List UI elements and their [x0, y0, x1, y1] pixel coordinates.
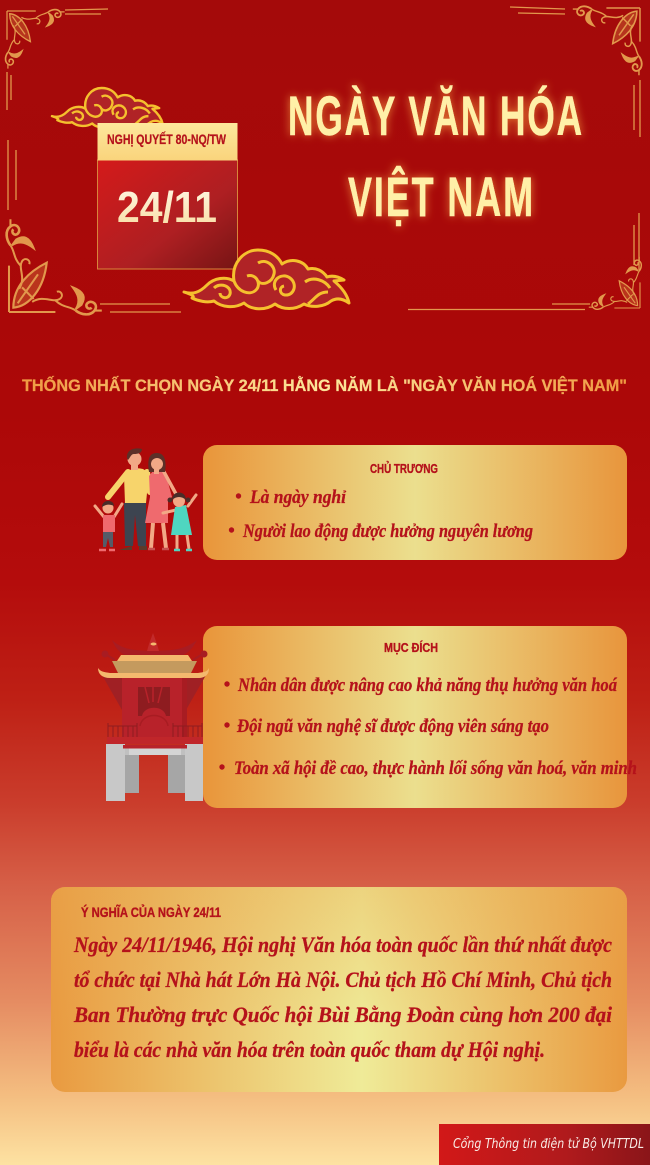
wall	[122, 678, 182, 738]
paragraph: biểu là các nhà văn hóa trên toàn quốc tham dự Hội nghị.	[74, 1037, 545, 1062]
panel heading: CHỦ TRƯƠNG	[370, 461, 438, 476]
calendar header	[98, 123, 238, 160]
side wings	[102, 675, 122, 710]
subheading: THỐNG NHẤT CHỌN NGÀY 24/11 HẰNG NĂM LÀ "NGÀY VĂN HOÁ VIỆT NAM"	[22, 375, 627, 395]
railings	[108, 723, 202, 737]
title	[288, 84, 584, 228]
title: VIỆT NAM	[348, 165, 535, 228]
floor band	[107, 737, 203, 744]
bullet list: Đội ngũ văn nghệ sĩ được động viên sáng tạo	[236, 716, 549, 737]
lower eave	[98, 668, 209, 678]
stone base	[106, 744, 203, 801]
window	[138, 687, 170, 726]
panel: mục đích	[203, 626, 637, 808]
paragraph: Ban Thường trực Quốc hội Bùi Bằng Đoàn cùng hơn 200 đại	[73, 1002, 613, 1027]
mother	[145, 453, 176, 549]
footer source	[439, 1124, 650, 1165]
calendar badge	[98, 123, 238, 269]
ornament: top-left corner frame	[6, 9, 108, 110]
panel heading: MỤC ĐÍCH	[384, 640, 438, 655]
calendar body	[98, 160, 238, 269]
paragraph: Ngày 24/11/1946, Hội nghị Văn hóa toàn quốc lần thứ nhất được	[73, 932, 612, 957]
bullet list: Là ngày nghỉ	[249, 487, 347, 508]
upper roof	[112, 640, 197, 657]
boy	[95, 501, 122, 550]
icon: family	[95, 448, 196, 550]
panel: ý nghĩa	[51, 887, 627, 1092]
paragraph	[73, 932, 613, 1062]
icon: small cloud	[52, 88, 163, 127]
panel: chủ trương	[203, 445, 627, 560]
ornament: bottom-right corner frame	[408, 213, 641, 310]
panel heading: Ý NGHĨA CỦA NGÀY 24/11	[81, 905, 221, 920]
date: 24/11	[117, 183, 217, 232]
girl	[163, 492, 196, 550]
icon: temple of literature gate	[98, 633, 209, 801]
ornament: top-right corner frame	[510, 6, 642, 137]
bullet list: Người lao động được hưởng nguyên lương	[242, 521, 533, 542]
ornament: bottom-left corner frame	[7, 140, 181, 314]
calendar header text: NGHỊ QUYẾT 80-NQ/TW	[107, 131, 227, 147]
bullet list	[229, 487, 533, 542]
father	[108, 448, 150, 550]
bullet list	[219, 675, 637, 779]
icon: large cloud	[184, 250, 349, 309]
